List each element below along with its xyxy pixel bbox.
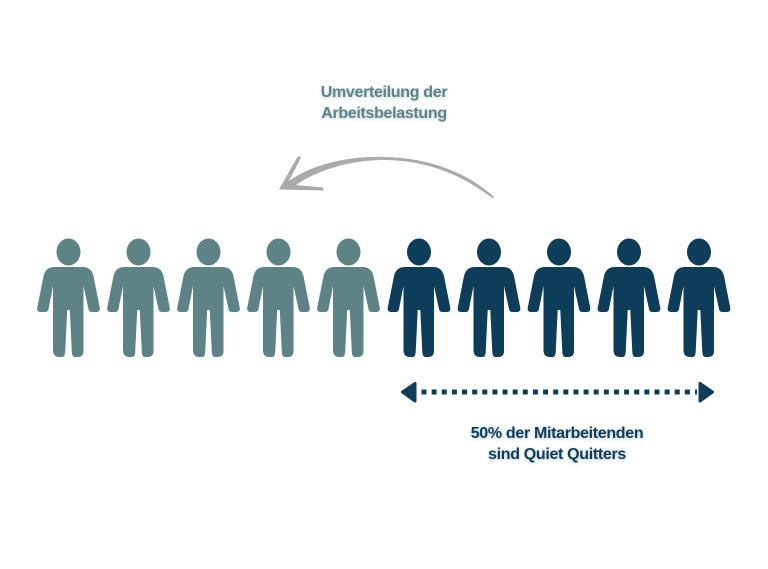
label: 50% der Mitarbeitenden sind Quiet Quitters: sind Quiet Quitters [488, 446, 626, 463]
heading: Umverteilung der Arbeitsbelastung [320, 84, 448, 124]
people: redistributed workload group [37, 238, 380, 357]
heading: Umverteilung der Arbeitsbelastung: Umverteilung der [321, 84, 447, 101]
arrow: dotted double-headed span [402, 384, 712, 401]
people: quiet quitters group [388, 238, 730, 357]
icon: curved redistribution arrow [279, 156, 494, 198]
label: 50% der Mitarbeitenden sind Quiet Quitters: 50% der Mitarbeitenden [471, 425, 643, 442]
label: 50% der Mitarbeitenden sind Quiet Quitters [470, 425, 644, 465]
heading: Umverteilung der Arbeitsbelastung: Arbeitsbelastung [321, 105, 447, 122]
